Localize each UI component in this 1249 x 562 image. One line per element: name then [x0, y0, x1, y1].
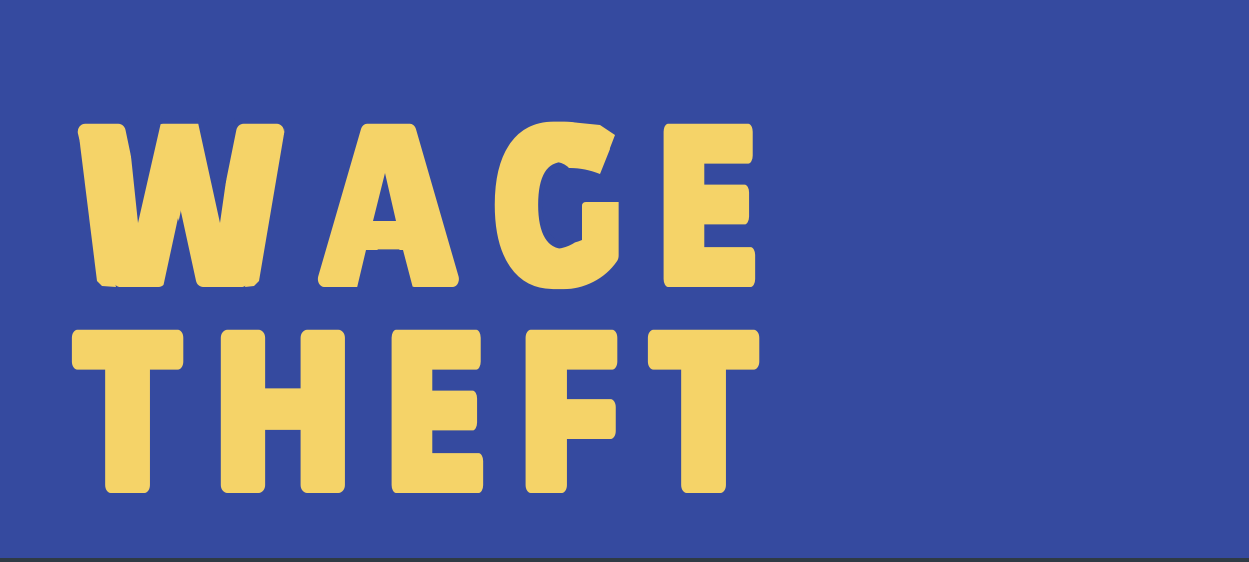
- title line: THEFT: T: [82, 292, 173, 531]
- title line: THEFT: [82, 292, 749, 531]
- title line: WAGE: W: [87, 86, 275, 325]
- title line: THEFT: H: [218, 292, 348, 531]
- title: wage theft: [78, 86, 749, 531]
- title line: THEFT: T: [658, 292, 749, 531]
- title line: THEFT: E: [395, 292, 476, 531]
- title line: WAGE: E: [667, 86, 748, 325]
- title line: WAGE: G: [499, 86, 617, 325]
- title line: THEFT: F: [527, 292, 612, 531]
- title line: WAGE: [78, 86, 748, 325]
- title line: WAGE: A: [327, 86, 450, 325]
